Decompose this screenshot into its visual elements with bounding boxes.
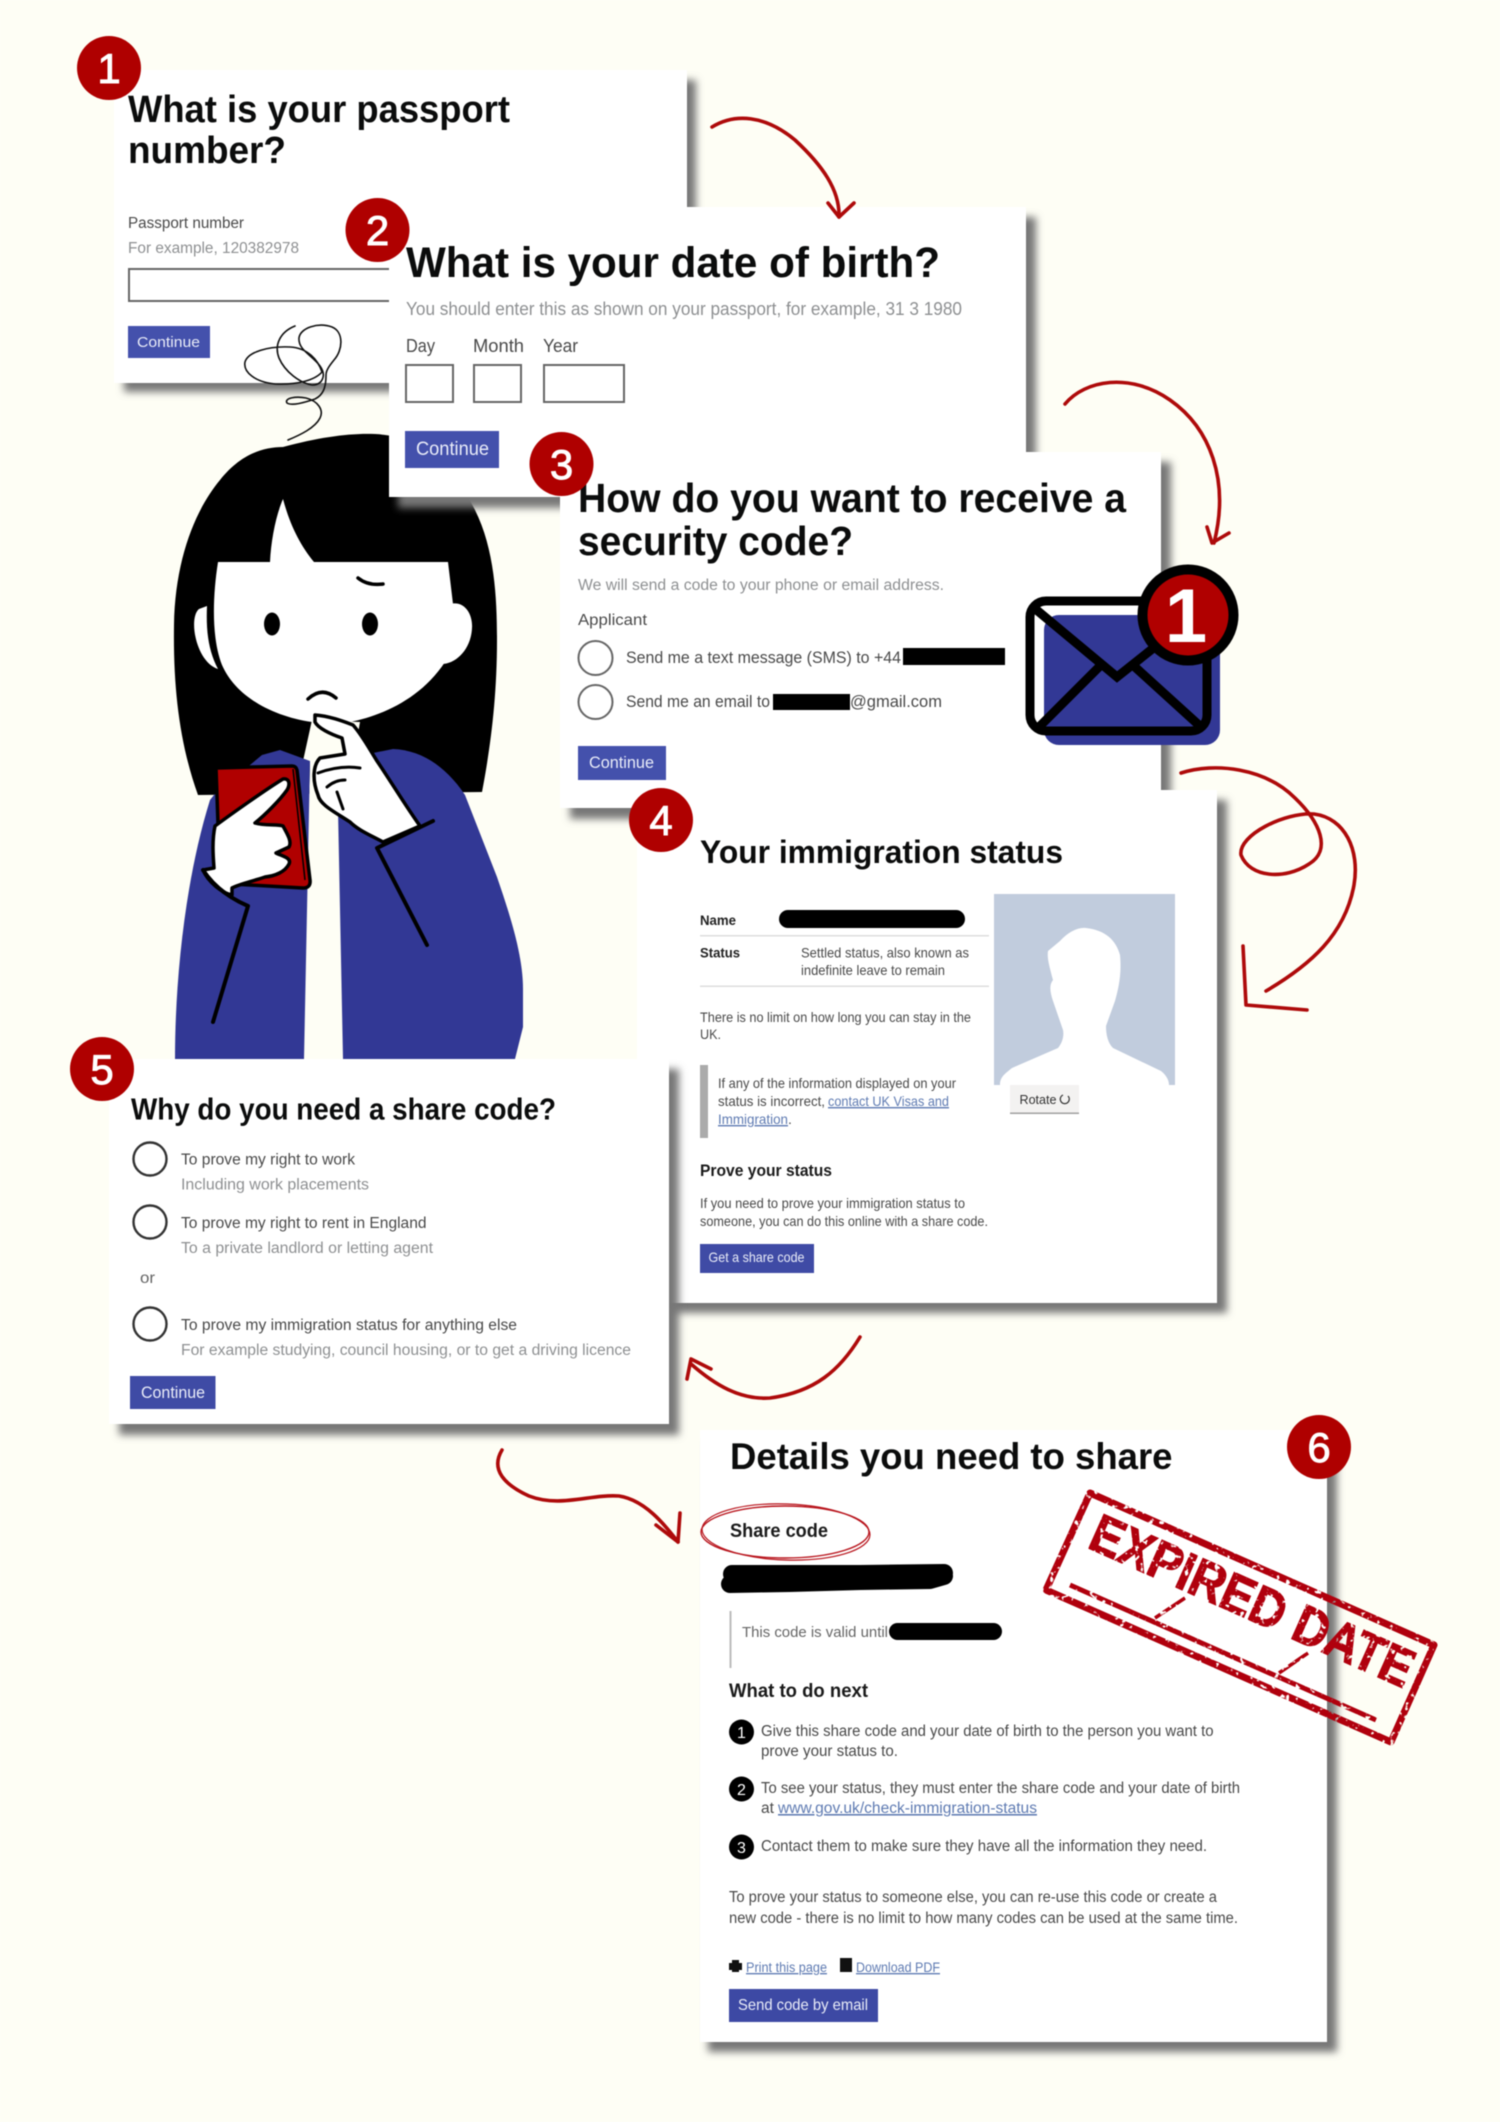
jacket: [175, 749, 523, 1059]
field: year: Year: [543, 336, 578, 356]
divider text: or: or: [140, 1270, 155, 1287]
subheading: what to do next: What to do next: [729, 1680, 868, 1702]
label: passport number: Passport number: [128, 215, 244, 232]
text: re-use code: To prove your status to someone else, you can re-use this code or create a: [729, 1889, 1217, 1906]
panel 6: details to share: [700, 1430, 1337, 2052]
option: email: Send me an email to: [626, 693, 770, 711]
label: share code circled: Share code: [730, 1521, 828, 1542]
badge 4: [629, 788, 693, 852]
arrow: step 1 to 2: [712, 118, 854, 217]
badge 6: 6: [1307, 1424, 1331, 1471]
field: month: Month: [473, 336, 524, 356]
heading: passport number: number?: [128, 130, 286, 172]
button: get a share code: Get a share code: [708, 1249, 805, 1265]
badge 5: 5: [90, 1046, 114, 1093]
option: right to rent: To prove my right to rent in England: [181, 1215, 426, 1232]
link: print this page: Print this page: [746, 1960, 827, 1975]
heading: security code: security code?: [578, 518, 853, 564]
arrow: step 3 to 4: [1181, 768, 1355, 1010]
button: continue: Continue: [141, 1384, 205, 1402]
row: status: indefinite leave to remain: [801, 962, 945, 978]
button: send code by email: Send code by email: [738, 1997, 868, 2014]
text: re-use code: [729, 1889, 1238, 1927]
option: right to work: [134, 1142, 369, 1194]
badge 4: 4: [649, 797, 673, 844]
inset: code validity: [730, 1611, 1002, 1668]
badge 6: [1287, 1415, 1351, 1479]
sleeve lines: [203, 821, 433, 1022]
field: day: [406, 336, 453, 402]
button: send code by email: [729, 1989, 878, 2022]
panel 2: date of birth: [389, 207, 1036, 508]
button: continue: Continue: [416, 439, 489, 460]
heading: immigration status: Your immigration status: [700, 834, 1063, 870]
option: text message: [578, 641, 1005, 675]
step 2: 2: [737, 1782, 746, 1799]
step 3: [729, 1834, 1207, 1860]
text: no limit: [700, 1009, 971, 1042]
icon: envelope with notification: [1030, 570, 1234, 745]
arrow: step 2 to 3: [1065, 382, 1229, 543]
row: status: Status: [700, 946, 740, 960]
left hand: [203, 779, 290, 895]
badge 2: [346, 198, 410, 262]
character: confused woman with phone: [174, 434, 523, 1059]
stamp text: EXPIRED DATE: [1081, 1503, 1423, 1700]
option: anything else: To prove my immigration status for anything else: [181, 1317, 517, 1334]
button: continue: Continue: [137, 334, 200, 351]
step 1: prove your status to.: [761, 1743, 898, 1760]
button: get a share code: [700, 1244, 814, 1273]
panel 1: passport number: [114, 70, 696, 392]
row: status: [700, 944, 989, 987]
redacted share code: [730, 1573, 944, 1584]
notification badge: 1: [1165, 574, 1207, 659]
panel 4: immigration status: [637, 790, 1227, 1313]
heading: date of birth: What is your date of birth?: [406, 239, 940, 287]
button: continue: [128, 326, 210, 358]
text: prove status: [700, 1195, 988, 1229]
option: right to work: To prove my right to work: [181, 1152, 355, 1168]
option: anything else: [134, 1308, 631, 1359]
step 3: 3: [737, 1840, 746, 1857]
button: rotate: [1010, 1085, 1079, 1114]
hair: [174, 434, 497, 795]
step 1: [729, 1720, 1214, 1760]
text: no limit: There is no limit on how long you can stay in the: [700, 1009, 971, 1025]
field: month: [473, 336, 524, 402]
badge 3: [530, 432, 594, 496]
right hand: [314, 715, 420, 842]
button: continue: Continue: [589, 754, 654, 772]
heading: passport number: [128, 89, 510, 172]
text: re-use code: new code - there is no limit to how many codes can be used at the same time.: [729, 1910, 1238, 1927]
text: prove status: If you need to prove your immigration status to: [700, 1195, 965, 1211]
button: rotate: Rotate: [1020, 1092, 1056, 1107]
hint: send a code: We will send a code to your phone or email address.: [578, 577, 944, 594]
scribble above head: [245, 325, 341, 440]
option: right to rent: [134, 1206, 434, 1257]
step 1: Give this share code and your date of birth to the person you want to: [761, 1723, 1214, 1740]
inset: code validity: This code is valid until: [742, 1624, 888, 1641]
option: anything else: For example studying, council housing, or to get a driving licence: [181, 1342, 631, 1359]
row: name: Name: [700, 913, 736, 928]
ears: [194, 603, 472, 669]
text: prove status: someone, you can do this online with a share code.: [700, 1213, 988, 1229]
label: applicant: Applicant: [578, 612, 648, 629]
link: download PDF: [840, 1958, 940, 1975]
option: text message: Send me a text message (SMS) to +44: [626, 649, 901, 667]
step 2: [729, 1776, 1240, 1817]
label: share code circled: [701, 1501, 871, 1563]
face: [214, 499, 453, 722]
text: no limit: UK.: [700, 1026, 721, 1042]
heading: passport number: What is your passport: [128, 89, 510, 131]
inset: contact notice: contact UK Visas and: [828, 1093, 949, 1109]
heading: security code: [578, 475, 1127, 564]
option: email: [578, 685, 942, 719]
input: passport number: [129, 269, 399, 301]
hint: passport example: For example, 120382978: [128, 240, 299, 257]
facial features: [264, 578, 383, 699]
photo placeholder: [994, 894, 1175, 1085]
step 2: To see your status, they must enter the share code and your date of birth: [761, 1780, 1240, 1797]
option: email: @gmail.com: [850, 693, 942, 711]
badge 2: 2: [366, 207, 389, 254]
inset: contact notice: If any of the information displayed on your: [718, 1075, 956, 1091]
row: name: [700, 910, 989, 936]
heading: why share code: Why do you need a share code?: [131, 1092, 556, 1126]
hint: date of birth: You should enter this as shown on your passport, for example, 31 3 1980: [406, 299, 962, 319]
heading: security code: How do you want to receive a: [578, 475, 1127, 521]
inset: contact notice: status is incorrect,: [718, 1093, 825, 1109]
option: right to work: Including work placements: [181, 1176, 369, 1194]
step 2: www.gov.uk/check-immigration-status: [777, 1800, 1037, 1817]
button: continue: [578, 746, 666, 780]
step 2: at: [761, 1800, 775, 1817]
phone: [216, 766, 310, 888]
button: continue: [130, 1376, 216, 1409]
field: day: Day: [406, 336, 435, 356]
field: year: [543, 336, 624, 402]
inset: contact notice: .: [788, 1111, 792, 1127]
inset: contact notice: [700, 1065, 956, 1138]
inset: contact notice: Immigration: [718, 1111, 788, 1127]
badge 3: 3: [550, 441, 573, 488]
badge 1: [77, 36, 141, 100]
heading: details: Details you need to share: [730, 1436, 1172, 1477]
link: download PDF: Download PDF: [856, 1960, 940, 1975]
step 3: Contact them to make sure they have all the information they need.: [761, 1838, 1207, 1855]
neck and shirt: [303, 720, 360, 1059]
stamp: expired date: [1046, 1493, 1434, 1742]
button: continue: [405, 431, 499, 468]
badge 5: [70, 1037, 134, 1101]
step 1: 1: [737, 1725, 746, 1742]
row: status: Settled status, also known as: [801, 944, 969, 960]
arrow: step 4 to 5: [687, 1337, 860, 1398]
arrow: step 5 to 6: [498, 1450, 680, 1542]
option: right to rent: To a private landlord or letting agent: [181, 1240, 434, 1257]
panel 3: security code: [560, 452, 1171, 819]
subheading: prove your status: Prove your status: [700, 1161, 832, 1180]
badge 1: 1: [97, 45, 121, 92]
panel 5: why share code: [109, 1059, 679, 1435]
notification badge: [1142, 570, 1234, 660]
